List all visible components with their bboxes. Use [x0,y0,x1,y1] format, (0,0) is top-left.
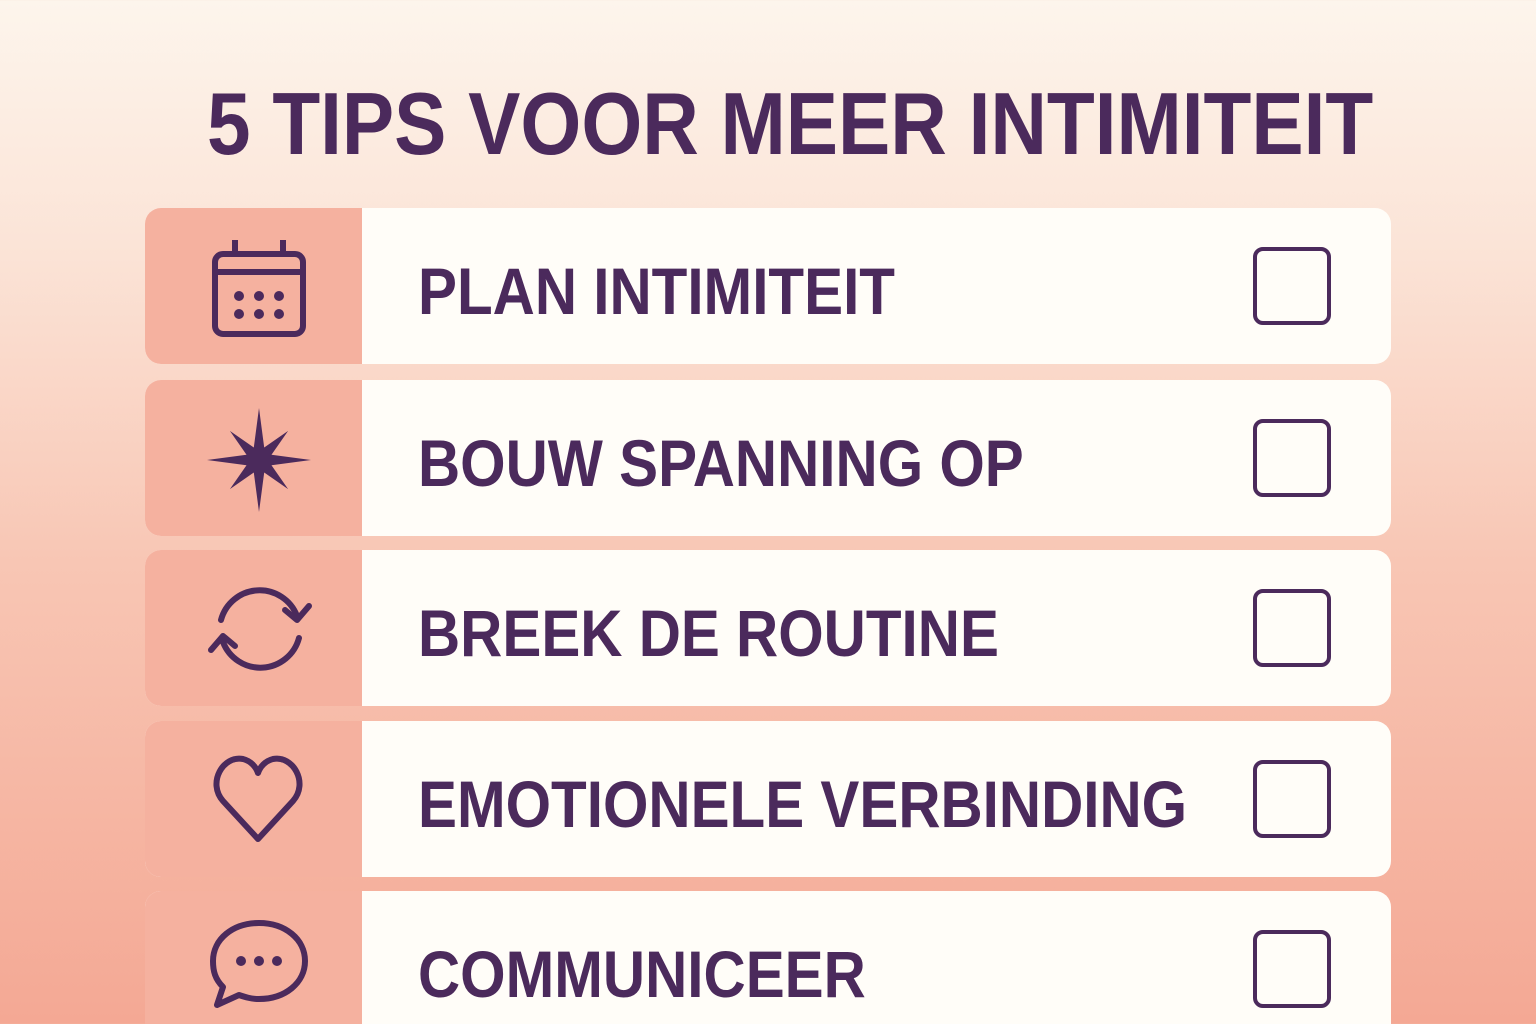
text: COMMUNICEER [418,937,866,1011]
text: BREEK DE ROUTINE [418,596,999,670]
checkbox [1253,589,1331,667]
title: 5 TIPS VOOR MEER INTIMITEIT [207,74,1373,173]
icon: star [145,380,362,536]
row: breek de routine [145,550,1391,706]
text: PLAN INTIMITEIT [418,254,895,328]
icon: heart [145,721,362,877]
row: plan intimiteit [145,208,1391,364]
text: BOUW SPANNING OP [418,426,1024,500]
text: EMOTIONELE VERBINDING [418,767,1187,841]
icon: refresh [145,550,362,706]
checkbox [1253,419,1331,497]
checkbox [1253,930,1331,1008]
checkbox [1253,760,1331,838]
row: bouw spanning op [145,380,1391,536]
row: emotionele verbinding [145,721,1391,877]
icon: speech bubble [145,891,362,1024]
row: communiceer [145,891,1391,1024]
icon: calendar [145,208,362,364]
checkbox [1253,247,1331,325]
